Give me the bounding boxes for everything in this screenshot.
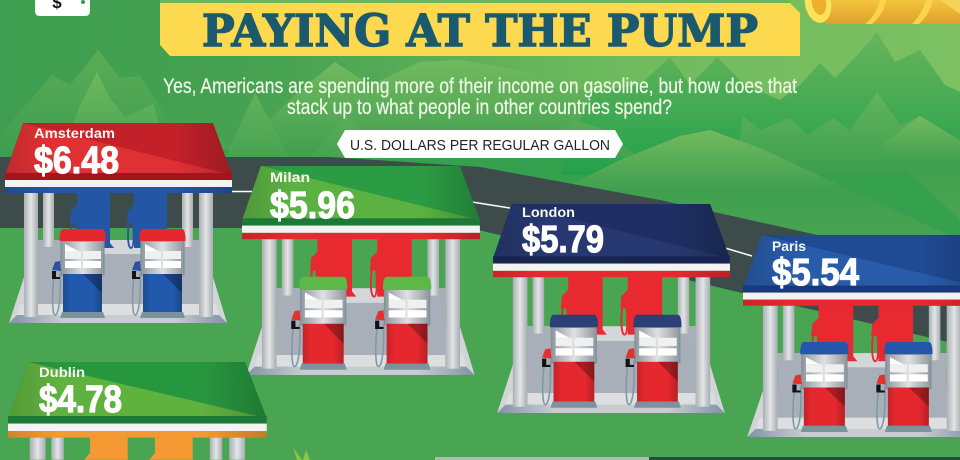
station: London [493,204,730,413]
icon: gold barrel [802,0,960,25]
price: Dublin: $4.78 [39,379,122,421]
title banner [160,0,800,57]
label: Amsterdam: Amsterdam [34,125,115,141]
price: London: $5.79 [522,219,604,261]
mountain range [0,32,960,300]
station: Paris [743,235,960,437]
label: Paris: Paris [772,238,806,254]
bottom strips [435,457,960,460]
intro text [163,75,797,119]
label: Dublin: Dublin [39,364,85,380]
intro text: stack up to what people in other countries spend? [287,96,672,119]
intro text: Yes, Americans are spending more of their income on gasoline, but how does that [163,75,797,98]
price: Milan: $5.96 [270,185,355,227]
price: Paris: $5.54 [772,252,859,294]
station: Amsterdam [5,123,232,323]
unit label pill [337,130,623,158]
unit label pill: U.S. DOLLARS PER REGULAR GALLON [350,137,610,154]
logo badge [35,0,90,16]
title: PAYING AT THE PUMP [202,6,758,57]
road lane dashes [232,192,752,256]
station: Dublin [8,362,267,460]
label: Milan: Milan [270,169,310,185]
label: London: London [522,204,575,220]
station: Milan [242,166,480,375]
icon: grass [293,447,310,460]
ground [0,228,960,460]
road [0,157,960,345]
price: Amsterdam: $6.48 [34,140,119,182]
